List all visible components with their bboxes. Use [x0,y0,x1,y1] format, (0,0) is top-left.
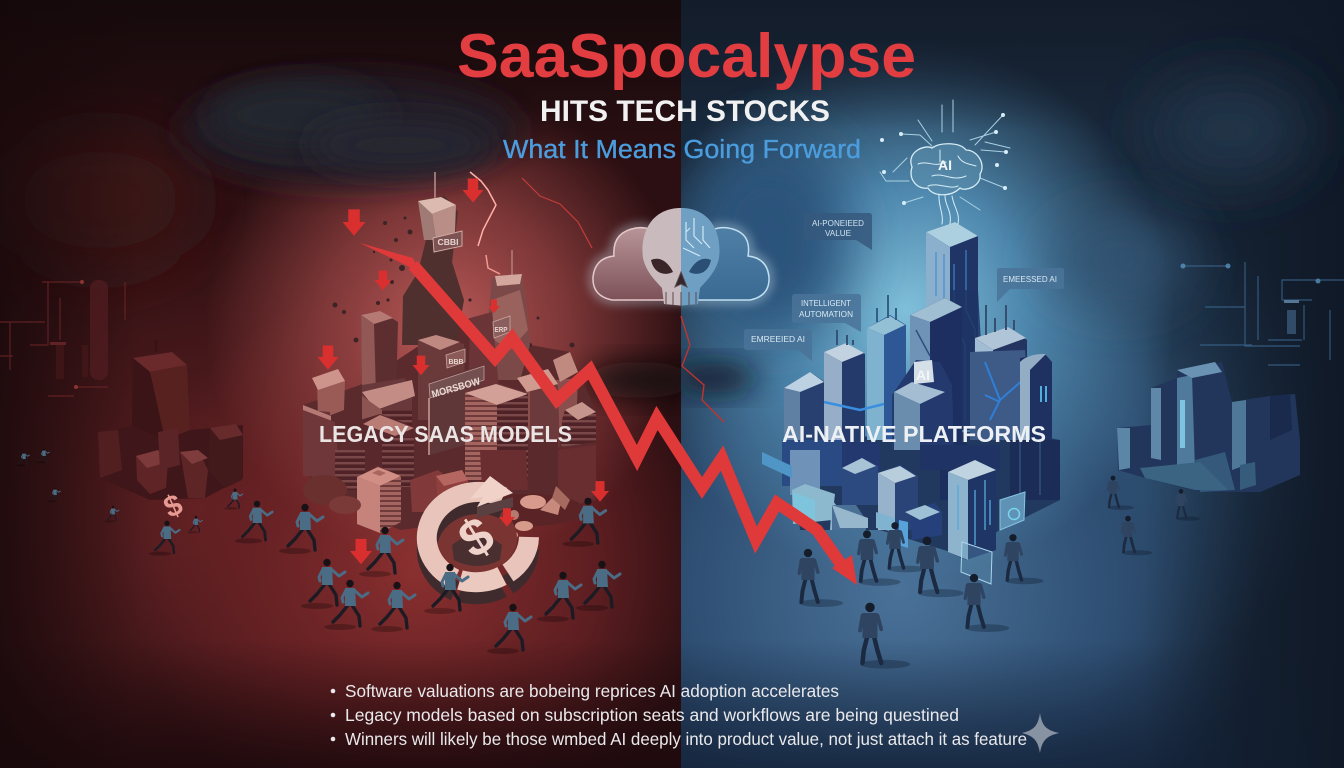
heading: SaaSpocalypse: SaaSpocalypse [457,22,916,91]
sign building [429,365,484,455]
small server blocks [762,452,1025,584]
glowing server tower [948,460,996,560]
icon: red lightning bolts [470,172,724,422]
icon: recycling dollar ring [427,476,529,594]
skull nose and teeth [666,272,696,306]
main tower [926,222,982,430]
AI native city [762,222,1060,584]
far-right AI city [1117,362,1300,492]
falling red arrows [318,178,609,564]
striped office tower [465,383,528,480]
panel: legacy red side background [0,0,698,768]
label: AI-Native Platforms: AI-NATIVE PLATFORMS [782,421,1046,447]
far-left crumbling city [98,340,243,500]
right block buildings [517,369,596,508]
sign building: MORSBOW [431,376,482,401]
collapsing tall tower [402,172,464,345]
callout: embedded AI left: EMREEIED AI [751,335,805,344]
lower rows [303,410,596,512]
front office building [357,466,401,533]
right tower [970,305,1032,440]
icon: AI brain with circuit rays [880,100,1010,224]
debris specks [332,216,574,348]
far right tower [1020,354,1052,440]
text block: key takeaways: Winners will likely be those wmbed AI deeply into product value, not just attach it as feature [345,729,1027,749]
AI central tower: AI [916,367,930,383]
ring arrow head [470,476,513,518]
callout: AI-powered value [804,213,872,250]
dollar block: $ [449,506,504,570]
collapsing tall tower: CBBI [438,237,458,247]
people: running legacy workers [16,448,620,654]
callout: embedded AI right [997,268,1064,302]
callout: AI-powered value: AI-PONEIEED [812,219,864,228]
second tower: ERP [494,325,508,334]
city base mass [790,430,1060,555]
text block: key takeaways [331,681,1027,749]
callout: intelligent automation: INTELLIGENT [801,299,851,308]
heading: What It Means Going Forward: What It Means Going Forward [503,136,861,164]
callout: AI-powered value: VALUE [825,229,851,238]
text block: key takeaways: Legacy models based on subscription seats and workflows are being questined [345,705,959,725]
second tower [910,298,962,450]
text block: key takeaways: Software valuations are bobeing reprices AI adoption accelerates [345,681,839,701]
left towers [784,330,884,470]
back left towers [867,295,906,440]
far-left faded circuits [0,280,125,396]
callout: intelligent automation: AUTOMATION [799,310,853,319]
second tower [468,250,530,400]
city base mass [303,318,596,530]
lower city blocks [782,440,1060,530]
icon: cloud skull [593,208,769,306]
storm cloud over legacy city [180,75,520,185]
AI central tower [892,360,954,450]
block buildings: BBB [448,357,464,366]
icon: small dollar sign on ground: $ [159,488,188,525]
heading: Hits Tech Stocks: HITS TECH STOCKS [540,95,830,128]
panel: AI-native blue side background [673,0,1344,768]
icon: sparkle star [1022,713,1059,753]
people: AI platform workers [799,476,1200,669]
callout: embedded AI right: EMEESSED AI [1003,275,1057,284]
callout: embedded AI left [744,329,812,361]
AI label in brain: AI [938,157,952,173]
legacy SaaS collapsing city [303,172,596,540]
far-right faded circuits [1180,262,1344,365]
label: Legacy SaaS Models: LEGACY SAAS MODELS [319,421,572,447]
callout: intelligent automation [792,294,861,332]
block buildings [303,311,578,500]
rubble mounds [303,475,585,540]
chart: red falling stock line [360,243,857,585]
